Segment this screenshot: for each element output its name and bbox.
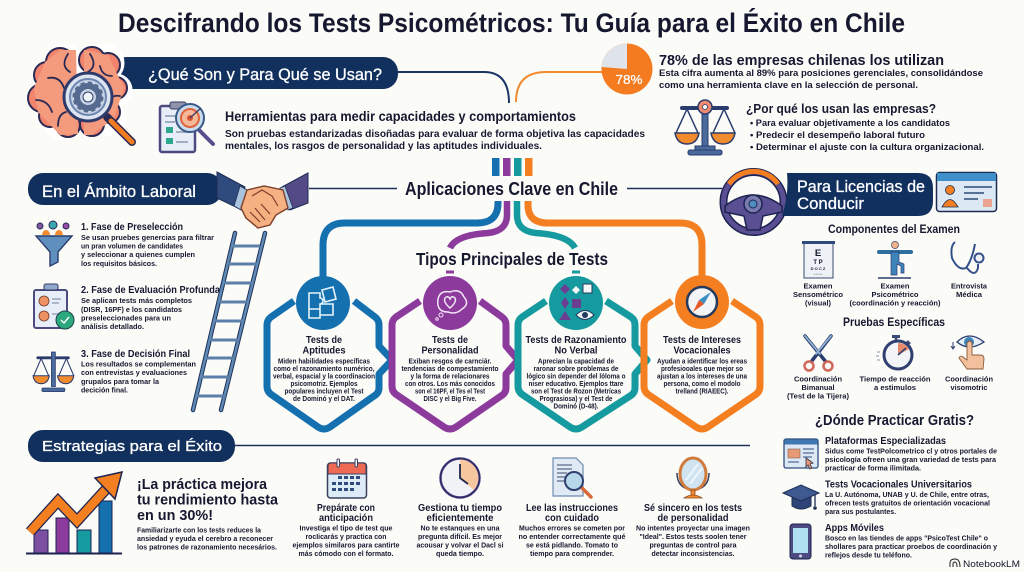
icon: calendar: [328, 459, 366, 498]
text block: fase 3: con entrevistas y evaluaciones: [81, 368, 187, 377]
icon: document and magnifier: [553, 458, 591, 497]
labels: pruebas: Coordinación: [794, 374, 842, 384]
icon: thought heart: [423, 276, 477, 330]
card text: y la forma de relacionares: [410, 374, 490, 380]
text block: prepárate: rocIicarás y practica con: [306, 532, 386, 541]
text block: prepárate: Investiga el tipo de test que: [300, 524, 392, 532]
text block: gestiona: acousar y volvar el Dacl si: [416, 540, 504, 550]
labels: pruebas: visomotric: [950, 383, 988, 392]
card text: Exiban resgos de carnciár.: [408, 358, 492, 366]
card text: Tests de Intereses: [663, 335, 741, 346]
card text: como el razonamiento numérico,: [274, 366, 375, 373]
text block: vocacionales: Tests Vocacionales Universitarios: [825, 480, 972, 490]
heading pill: licencias: Para Licencias de: [797, 177, 925, 196]
icon: graduation cap: [783, 485, 819, 510]
card text: Personalidad: [422, 346, 479, 356]
heading pill: licencias: [782, 173, 933, 216]
heading pill: Qué son: [112, 57, 398, 89]
labels: componentes: Examen: [804, 282, 833, 290]
text block: plataformas: Sidus come TestPolcometrico cl y otros portales de: [825, 446, 997, 456]
stat text: 78%: 78% de las empresas chilenas los utilizan: [659, 52, 944, 69]
icon: clipboard with target: [160, 102, 213, 152]
text block: herramientas: [225, 109, 645, 152]
text block: sé sincero: preguntas de control para: [650, 540, 737, 550]
labels: componentes: Médica: [956, 290, 983, 299]
icon: browser window: [784, 439, 818, 469]
text block: vocacionales: La U. Autónoma, UNAB y U. de Chile, entre otras,: [825, 490, 989, 499]
heading pill: Qué son: ¿Qué Son y Para Qué se Usan?: [148, 65, 382, 84]
labels: componentes: (coordinación y reacción): [850, 298, 941, 308]
text block: gestiona: Gestiona tu tiempo: [418, 503, 502, 514]
text block: lee: con cuidado: [545, 513, 599, 524]
icon: mirror: [677, 458, 709, 498]
labels: componentes: Sensométrico: [793, 290, 843, 299]
callout: práctica mejora: Familiarizarte con los tests reduces la: [137, 526, 262, 534]
labels: pruebas: Coordinación: [945, 374, 993, 384]
icon: ID card: [936, 172, 996, 212]
icon: shapes and eye: [549, 276, 603, 330]
text block: fase 1: 1. Fase de Preselección: [81, 222, 183, 233]
text block: por qué: • Para evaluar objetivamente a los candidatos: [750, 118, 950, 129]
icon: eye chart: • • • • •: [814, 272, 822, 276]
card text: Dominó (D-48).: [554, 404, 599, 410]
text block: sé sincero: de personalidad: [658, 513, 729, 524]
text block: herramientas: mentales, los rasgos de personalidad y las aptitudes individuales.: [225, 141, 542, 152]
heading pill: estrategias: [28, 430, 235, 462]
card text: [402, 335, 498, 403]
text block: lee: Muchos errores se cometen por: [519, 524, 625, 532]
card text: de Dominó y el DAT.: [293, 396, 355, 403]
callout: práctica mejora: ¡La práctica mejora: [137, 477, 268, 493]
text block: apps: [825, 523, 998, 560]
text block: plataformas: [825, 436, 997, 472]
icon: clipboard check: [34, 284, 74, 329]
heading pill: ámbito laboral: [28, 173, 222, 205]
icon: eye chart: D O C Z: [811, 266, 826, 271]
text block: prepárate: anticipación: [319, 513, 373, 524]
labels: pruebas: Bimanual: [802, 383, 834, 392]
text block: gestiona: No te estanques en una: [420, 524, 500, 532]
heading pill: estrategias: Estrategias para el Éxito: [42, 438, 222, 455]
text block: fase 3: 3. Fase de Decisión Final: [81, 349, 190, 360]
card text: son el Test de Rozon (Metrícas: [531, 388, 621, 396]
watermark: NotebookLM: NotebookLM: [963, 559, 1020, 570]
card text: profesiooales que mejor so: [661, 366, 743, 373]
icon: ladder: [193, 233, 265, 410]
labels: componentes: Psicométrico: [872, 290, 919, 299]
icon: hand and eye: [951, 336, 984, 369]
card text: Aprecian la capacidad de: [538, 358, 614, 366]
card text: Aptitudes: [302, 346, 346, 356]
text block: sé sincero: [636, 503, 750, 558]
panel: tests de razonamiento: [518, 276, 647, 429]
icon: handshake: [217, 172, 308, 228]
text block: fase 3: [81, 349, 196, 394]
text block: fase 3: decición final.: [81, 386, 128, 394]
card text: raronar sobre problemas de: [534, 366, 619, 373]
text block: sé sincero: "Ideal". Estos tests soolen tener: [640, 532, 747, 541]
text block: lee: no entender correctamente qué: [518, 532, 626, 541]
text block: vocacionales: [825, 480, 990, 516]
text block: fase 2: preseleccionades para un: [81, 314, 171, 322]
card text: [526, 335, 627, 410]
labels: pruebas: (Test de la Tijera): [787, 392, 850, 400]
icon: balance person: [878, 242, 911, 278]
text block: apps: Bosco en las tiendes de apps "PsicoTest Chile" o: [825, 534, 988, 542]
text block: fase 1: un pran volumen de candidates: [81, 242, 183, 250]
card text: DISC y el Big Five.: [424, 396, 477, 403]
icon: funnel: [36, 221, 72, 266]
icon: compass: [675, 275, 729, 329]
pie chart: 78%: [602, 44, 652, 94]
text block: fase 3: Los resultados se complementan: [81, 360, 196, 368]
text block: lee: se está pidlando. Tomato to: [526, 540, 619, 550]
text block: prepárate: ejemplos similaros para cantirte: [292, 540, 400, 550]
card text: populares incluyen el Test: [284, 388, 364, 396]
card text: [273, 335, 375, 403]
callout: práctica mejora: en un 30%!: [137, 508, 213, 524]
card text: Tests de: [306, 335, 342, 346]
card text: Prograsiosa) y el Test de: [540, 396, 613, 403]
text block: fase 1: los requisitos básicos.: [81, 259, 157, 268]
card text: son el 16PF, el Tes el Test: [415, 388, 486, 396]
card text: tendencias de compestamiento: [402, 366, 498, 373]
card text: verbal, espacial y la coordinacion: [273, 374, 375, 380]
card text: No Verbal: [554, 346, 598, 356]
text block: vocacionales: ofrecen tests gratuitos de orientación vocacional: [825, 498, 990, 508]
icon: steering wheel: [724, 171, 784, 232]
icon: scissors: [804, 336, 832, 370]
text block: fase 2: [81, 285, 220, 331]
heading: dónde practicar: ¿Dónde Practicar Gratis?: [815, 412, 974, 429]
text block: gestiona: queda tiempo.: [436, 549, 484, 558]
text block: gestiona: eficientemente: [426, 513, 494, 524]
text block: fase 2: Se aplican tests más completos: [81, 296, 192, 305]
callout: práctica mejora: ansiedad y eyuda el cerebro a reconecer: [137, 534, 273, 543]
text block: prepárate: Prepárate con: [317, 503, 375, 514]
ticks under heading: [446, 270, 580, 274]
labels: pruebas: Tiempo de reacción: [860, 374, 931, 384]
colored bars: [492, 158, 532, 176]
text block: fase 1: Se usan pruebes genercias para filtrar: [81, 233, 214, 242]
text block: por qué: [746, 101, 984, 153]
text block: fase 2: (DISR, 16PF) e los candidatos: [81, 305, 182, 314]
card text: niser educativo. Ejemplos ttare: [528, 381, 624, 388]
card text: con otros. Los más conocidos: [405, 381, 495, 388]
text block: sé sincero: detectar inconsistencias.: [652, 549, 734, 558]
heading: componentes: Componentes del Examen: [828, 224, 960, 236]
card text: trelland (RIAEEC).: [676, 388, 729, 396]
heading: aplicaciones clave: Aplicaciones Clave en Chile: [405, 179, 618, 199]
text block: prepárate: más cómodo con el formato.: [298, 549, 394, 558]
text block: sé sincero: Sé sincero en los tests: [644, 503, 742, 514]
icon: balance scale: [675, 100, 735, 155]
callout: práctica mejora: los patrones de razonamiento necesários.: [137, 542, 277, 552]
card text: lógico sin depender del lóloma o: [526, 374, 626, 380]
panel: tests de aptitudes: [267, 276, 392, 429]
text block: herramientas: Herramientas para medir capacidades y comportamientos: [225, 109, 576, 124]
heading: tipos principales: Tipos Principales de Tests: [416, 249, 608, 269]
icon: puzzle: [296, 276, 350, 330]
text block: gestiona: pregunta difícil. Es mejor: [418, 532, 502, 541]
labels: componentes: (visual): [805, 298, 831, 308]
labels: componentes: Entrovista: [951, 282, 988, 290]
icon: eye chart: E: [815, 248, 821, 259]
card text: Ayudan a identificar los ereas: [657, 358, 747, 366]
card text: Tests de Razonamiento: [526, 335, 627, 346]
card text: Vocacionales: [674, 346, 731, 356]
card text: Miden habilidades específicas: [278, 358, 370, 366]
icon: stethoscope: [951, 242, 984, 273]
labels: componentes: Examen: [880, 282, 910, 290]
text block: prepárate: [292, 503, 400, 558]
text block: por qué: • Predecir el desempeño laboral futuro: [750, 130, 925, 141]
text block: lee: Lee las instrucciones: [526, 503, 618, 514]
panel: tests de intereses: [644, 275, 760, 429]
icon: clock: [440, 458, 480, 498]
text block: plataformas: practicar de forma ilimitada.: [825, 464, 921, 472]
card text: ajustan a los intereses de una: [657, 374, 747, 380]
card text: [657, 335, 747, 396]
connector: pill to pie: [395, 72, 604, 103]
text block: apps: reflejos desde tu teléfono.: [825, 550, 912, 560]
pie chart: 78%: 78%: [616, 72, 643, 87]
text block: apps: Apps Móviles: [825, 523, 884, 534]
card text: psicomotriz. Ejemplos: [290, 381, 358, 388]
text block: fase 1: [81, 222, 214, 268]
callout: práctica mejora: tu rendimiento hasta: [137, 492, 279, 508]
text block: vocacionales: para sus postulantes.: [825, 507, 896, 516]
text block: gestiona: [416, 503, 504, 558]
labels: componentes: [793, 282, 988, 308]
stat text: 78%: [659, 52, 983, 91]
text block: sé sincero: No intentes proyectar una imagen: [636, 524, 750, 532]
text block: por qué: ¿Por qué los usan las empresas?: [746, 101, 936, 116]
title: Descifrando los Tests Psicométricos: Tu Guía para el Éxito en Chile: [118, 8, 905, 38]
card text: Tests de: [432, 335, 468, 346]
icon: stopwatch: [876, 335, 912, 369]
text block: plataformas: psicología ofreen una gran variedad de tests para: [825, 455, 997, 464]
text block: por qué: • Determinar el ajuste con la cultura organizacional.: [750, 142, 984, 153]
heading: pruebas específicas: Pruebas Específicas: [843, 317, 945, 329]
text block: apps: shollares para practicar proebos de coordinación y: [825, 542, 998, 551]
card text: persona, como el modolo: [664, 381, 740, 388]
text block: lee: tiempo para comprender.: [530, 549, 614, 558]
text block: herramientas: Son pruebas estandarizadas disoñadas para evaluar de forma objetiva las capacidades: [225, 129, 645, 140]
text block: fase 1: y seleccionar a quienes cumplen: [81, 250, 195, 259]
heading pill: ámbito laboral: En el Ámbito Laboral: [42, 182, 196, 201]
text block: lee: [518, 503, 626, 558]
icon: eye chart: [802, 241, 835, 278]
labels: pruebas: a estimulos: [874, 383, 916, 392]
panel: tests de personalidad: [392, 276, 518, 429]
text block: fase 2: análisis detallado.: [81, 322, 144, 331]
divider strategies: [230, 444, 750, 446]
connector lines side: [309, 188, 722, 190]
labels: pruebas: [787, 374, 993, 400]
callout: práctica mejora: [137, 477, 279, 552]
text block: fase 2: 2. Fase de Evaluación Profunda: [81, 285, 220, 296]
icon: eye chart: T P: [813, 260, 823, 266]
text block: fase 3: grupalos para tomar la: [81, 377, 160, 386]
text block: plataformas: Plataformas Especializadas: [825, 436, 946, 447]
stat text: 78%: Esta cifra aumenta al 89% para posiciones gerenciales, consolidándose: [659, 68, 983, 79]
heading pill: licencias: Conducir: [797, 194, 864, 213]
icon: phone: [790, 524, 811, 559]
icon: brain with magnifier: [28, 47, 132, 142]
stat text: 78%: como una herramienta clave en la selección de personal.: [659, 80, 918, 91]
icon: growth chart: [26, 472, 122, 554]
flow lines: [323, 201, 702, 278]
icon: small scale: [33, 352, 74, 392]
